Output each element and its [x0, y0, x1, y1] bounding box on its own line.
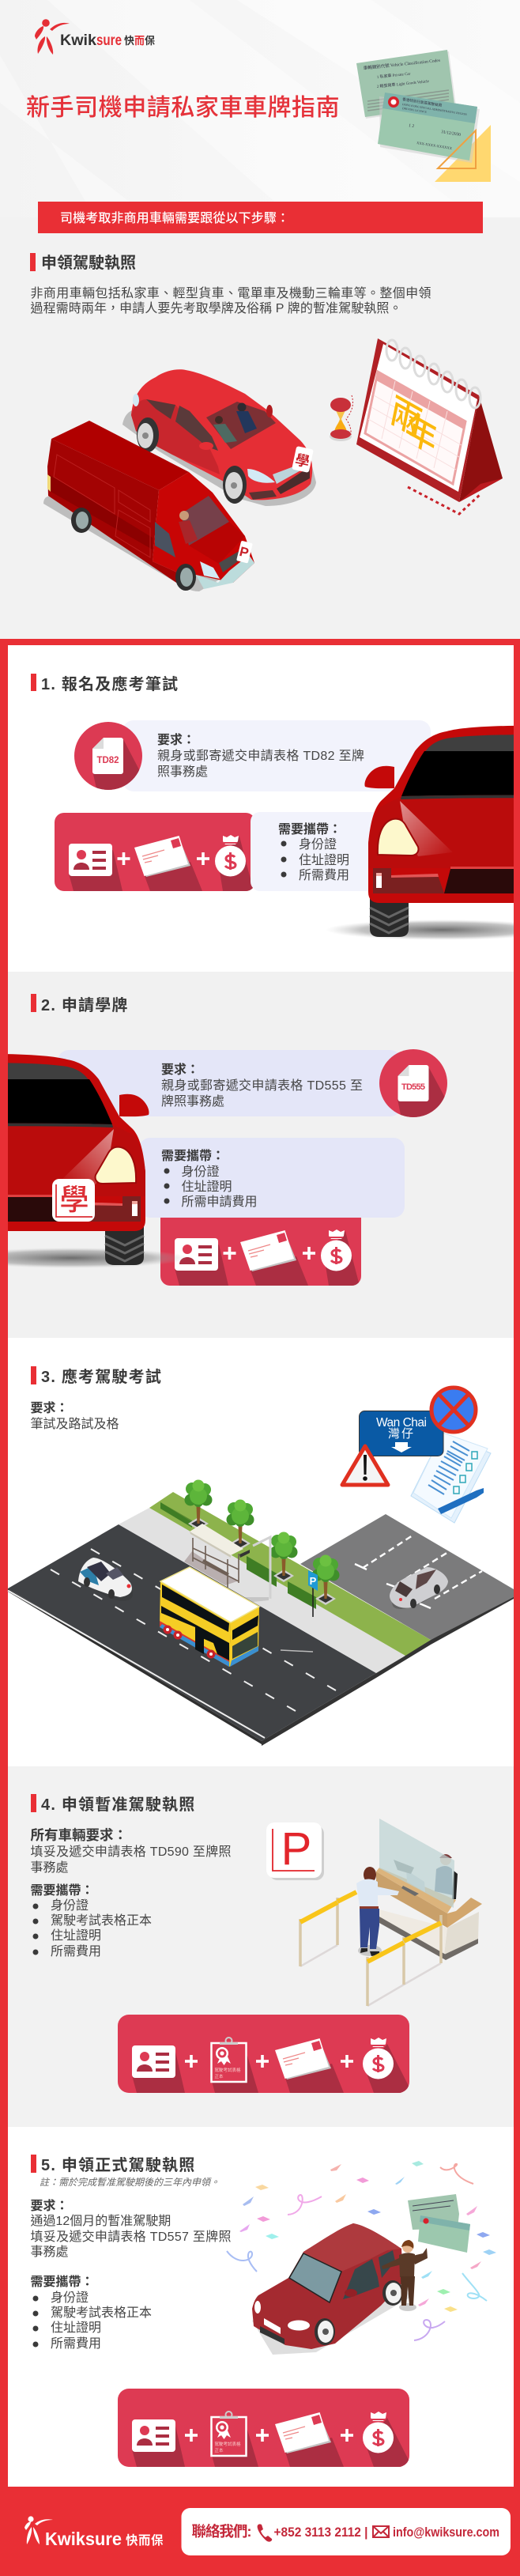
requirement text: step 5: 要求：	[30, 2199, 69, 2213]
requirement text: step 5: 通過12個月的暫准駕駛期	[30, 2214, 171, 2228]
intro paragraph: 過程需時兩年，申請人要先考取學牌及俗稱 P 牌的暫准駕駛執照。	[30, 301, 401, 315]
illustration: car front right	[326, 726, 520, 940]
requirement text: step 4: 所有車輛要求：	[30, 1827, 127, 1843]
requirement text: step 5: 填妥及遞交申請表格 TD557 至牌照	[30, 2230, 231, 2244]
checklist bubble: step 1	[251, 812, 385, 891]
requirement text: step 5	[30, 2199, 231, 2351]
illustration: checklist with pen	[411, 1433, 491, 1523]
illustration: silver car in parking	[387, 1566, 450, 1616]
logo: Kwiksure: Kwik	[60, 32, 96, 49]
panel: step 1	[31, 674, 520, 940]
requirement bubble: step 2: TD555	[401, 1082, 425, 1092]
icon: trees	[185, 1480, 340, 1605]
contact box: 聯絡我們:	[191, 2523, 251, 2540]
icon: hourglass	[330, 395, 352, 441]
checklist bubble: step 1: 需要攜帶：	[278, 822, 341, 837]
requirement bubble: step 1: TD82	[96, 756, 119, 765]
heading: step 2: 2. 申請學牌	[41, 996, 129, 1014]
illustration: calendar two years	[356, 338, 503, 514]
panel: step 3	[8, 1366, 514, 1746]
panel: frame and section backgrounds	[0, 639, 520, 2576]
illustration: driving licence cards: 2 輕型貨車 Light Goods Vehicle	[376, 78, 430, 89]
illustration: bus shelter	[184, 1524, 250, 1591]
requirement text: step 3: 要求：	[30, 1401, 69, 1415]
illustration: driving licence cards: 31/12/2030	[441, 130, 462, 138]
requirement text: step 5: 駕駛考試表格正本	[51, 2306, 152, 2320]
illustration: confetti and ribbons	[227, 2161, 496, 2340]
illustration: driving licence cards: 車輛類別代號 Vehicle Classification Codes	[363, 57, 440, 71]
illustration: red van	[43, 421, 254, 591]
illustration: car front left with learner plate	[0, 1054, 188, 1268]
illustration: driving licence cards: HONG KONG SPECIAL ADMINISTRATIVE REGION	[402, 103, 467, 116]
requirement text: step 3	[30, 1401, 119, 1431]
banner: steps intro	[38, 202, 483, 233]
illustration: driving licence cards	[356, 50, 491, 182]
requirement text: step 4: 身份證	[51, 1898, 89, 1913]
icons: items to bring, step 2	[160, 1207, 361, 1286]
requirement bubble: step 2	[58, 1049, 447, 1117]
requirement text: step 3: 筆試及路試及格	[30, 1417, 119, 1431]
icon: phone	[258, 2524, 272, 2542]
icon: envelope	[373, 2526, 389, 2537]
requirement text: step 4: 所需費用	[51, 1944, 101, 1958]
requirement text: step 4: 住址證明	[51, 1928, 101, 1943]
checklist bubble: step 2: 需要攜帶：	[161, 1149, 224, 1163]
icon: probationary P plate	[266, 1822, 324, 1880]
requirement bubble: step 2: 要求：	[161, 1063, 199, 1077]
illustration: double decker bus	[160, 1567, 259, 1667]
checklist bubble: step 2	[139, 1138, 405, 1218]
intro paragraph	[30, 285, 431, 315]
contact box	[182, 2508, 511, 2555]
icon: parking sign: P	[310, 1575, 317, 1587]
heading: driving licence: 申領駕駛執照	[41, 254, 136, 272]
icon: no stopping sign	[431, 1388, 476, 1432]
icons: items to bring, step 4	[118, 2015, 409, 2093]
banner: steps intro: 司機考取非商用車輛需要跟從以下步驟：	[60, 211, 289, 225]
illustration: driving licence cards: XXX-XXXX-XXXXXX	[416, 141, 453, 150]
heading: step 5: 5. 申領正式駕駛執照	[41, 2156, 195, 2174]
illustration: licensing counter	[300, 1819, 482, 2006]
requirement text: step 5: 需要攜帶：	[30, 2275, 94, 2289]
illustration: driving licence cards: 1 2	[409, 123, 415, 129]
requirement text: step 5: 所需費用	[51, 2336, 101, 2351]
checklist bubble: step 1: 住址證明	[299, 853, 349, 867]
requirement text: step 5: 事務處	[30, 2245, 69, 2259]
checklist bubble: step 2: 住址證明	[182, 1180, 232, 1194]
illustration: red car: 學	[294, 451, 311, 470]
illustration: Wan Chai road sign: Wan Chai	[376, 1416, 427, 1430]
icon: probationary P plate: P	[281, 1823, 311, 1875]
heading: step 3: 3. 應考駕駛考試	[41, 1367, 162, 1386]
illustration: driving licence cards: 香港特別行政區駕駛執照	[402, 96, 443, 108]
footer logo	[24, 2516, 164, 2549]
requirement bubble: step 1	[74, 720, 431, 799]
illustration: red car and licence holder	[252, 2194, 470, 2355]
footer logo: Kwiksure	[45, 2529, 122, 2549]
note: 註：需於完成暫准駕駛期後的三年內申領。	[40, 2177, 220, 2188]
icon: learner plate	[52, 1179, 95, 1222]
requirement text: step 4: 駕駛考試表格正本	[51, 1913, 152, 1928]
illustration: Wan Chai road sign	[359, 1411, 443, 1456]
icon: warning triangle	[342, 1446, 388, 1485]
illustration: red van: P	[238, 544, 251, 561]
requirement text: step 5: 住址證明	[51, 2321, 101, 2335]
checklist bubble: step 1: 身份證	[299, 837, 337, 852]
contact box: +852 3113 2112 |	[273, 2525, 368, 2540]
logo: Kwiksure: 快而保	[124, 35, 155, 47]
requirement text: step 4	[30, 1827, 231, 1958]
heading: step 1: 1. 報名及應考筆試	[41, 674, 179, 693]
requirement bubble: step 2: 牌照事務處	[161, 1094, 224, 1109]
icons: items to bring, step 4: 駕駛考試表格	[215, 2067, 241, 2073]
icons: items to bring, step 5	[118, 2389, 409, 2467]
title: 新手司機申請私家車車牌指南	[26, 95, 340, 121]
illustration: road scene	[8, 1492, 514, 1746]
illustration: driving licence cards: 1 私家車 Private Car	[376, 71, 411, 80]
illustration: driving licence cards: DRIVING LICENCE	[402, 107, 428, 114]
requirement bubble: step 1: 要求：	[157, 733, 195, 747]
intro paragraph: 非商用車輛包括私家車、輕型貨車、電單車及機動三輪車等。整個申領	[30, 285, 431, 300]
icons: items to bring, step 5: 駕駛考試表格	[215, 2441, 241, 2447]
checklist bubble: step 2: 身份證	[182, 1165, 220, 1179]
icons: items to bring, step 5: 正本	[215, 2447, 224, 2453]
requirement bubble: step 2: 親身或郵寄遞交申請表格 TD555 至	[161, 1078, 363, 1093]
requirement text: step 4: 需要攜帶：	[30, 1883, 94, 1898]
contact box: info@kwiksure.com	[393, 2525, 499, 2540]
requirement text: step 4: 事務處	[30, 1860, 69, 1875]
illustration: white car on road	[77, 1558, 138, 1608]
illustration: street lamp	[245, 1537, 270, 1602]
panel: step 2	[0, 994, 454, 1286]
requirement text: step 5: 身份證	[51, 2291, 89, 2305]
icons: items to bring, step 4: 正本	[215, 2073, 224, 2079]
checklist bubble: step 2: 所需申請費用	[182, 1195, 258, 1209]
panel: header background	[0, 0, 520, 217]
illustration: red car	[122, 369, 316, 506]
requirement text: step 4: 填妥及遞交申請表格 TD590 至牌照	[30, 1845, 231, 1859]
requirement bubble: step 1: 親身或郵寄遞交申請表格 TD82 至牌	[157, 749, 364, 763]
icon: learner plate: 學	[60, 1184, 89, 1216]
heading: step 4: 4. 申領暫准駕駛執照	[41, 1796, 195, 1814]
requirement bubble: step 1: 照事務處	[157, 765, 208, 779]
illustration: calendar two years: 年	[402, 406, 440, 462]
illustration: Wan Chai road sign: 灣仔	[388, 1427, 415, 1441]
footer logo: 快而保	[126, 2533, 164, 2548]
logo: Kwiksure	[35, 19, 155, 55]
checklist bubble: step 1: 所需費用	[299, 868, 349, 882]
icons: items to bring, step 1	[55, 813, 255, 891]
logo: Kwiksure: sure	[96, 32, 122, 49]
illustration: calendar two years: 兩	[387, 390, 425, 445]
icon: parking sign	[281, 1570, 318, 1652]
panel: step 4	[30, 1794, 482, 2093]
panel: step 5	[30, 2155, 496, 2467]
